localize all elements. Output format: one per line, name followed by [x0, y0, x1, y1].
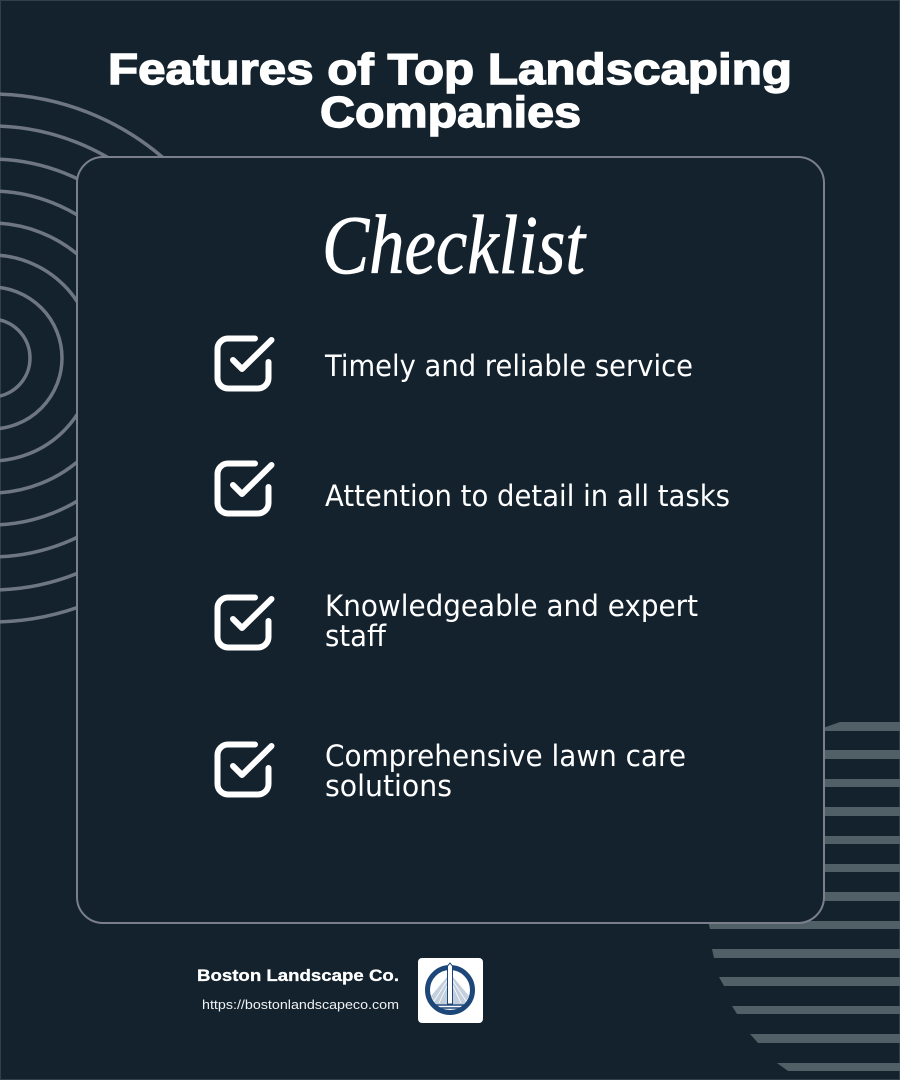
title: Features of Top Landscaping: [108, 45, 792, 94]
decorative concentric circles: [0, 94, 255, 622]
item text: [325, 739, 686, 803]
panel: checklist: [77, 157, 824, 923]
icon: company logo: [418, 958, 483, 1023]
checklist heading: Checklist: [322, 199, 587, 292]
item text: solutions: [325, 769, 452, 803]
decorative stripes: [708, 722, 900, 1071]
item text: Knowledgeable and expert: [325, 589, 698, 623]
title: [108, 45, 792, 137]
panel background: [77, 157, 824, 923]
icon: checkbox: [218, 464, 272, 514]
title: Companies: [320, 88, 581, 137]
item 1: timely service: [218, 338, 693, 388]
item text: staff: [325, 619, 387, 653]
footer company name: Boston Landscape Co.: [197, 966, 399, 985]
item text: [325, 589, 698, 653]
item 3: expert staff: [218, 589, 698, 653]
item 2: attention to detail: [218, 464, 730, 514]
icon: checkbox: [218, 744, 272, 794]
icon: checkbox: [218, 338, 272, 388]
item text: Comprehensive lawn care: [325, 739, 686, 773]
item text: Timely and reliable service: [324, 349, 693, 383]
icon: checkbox: [218, 598, 272, 648]
item text: Attention to detail in all tasks: [325, 479, 730, 513]
footer url: https://bostonlandscapeco.com: [202, 997, 399, 1012]
item 4: lawn care: [218, 739, 686, 803]
